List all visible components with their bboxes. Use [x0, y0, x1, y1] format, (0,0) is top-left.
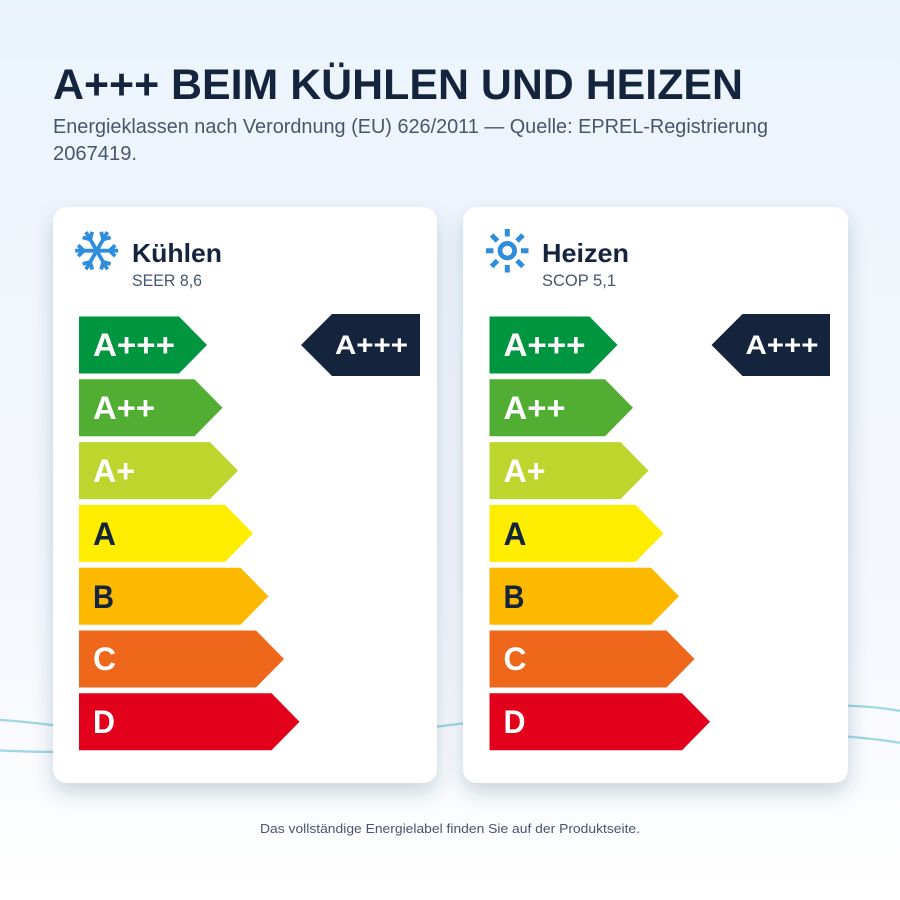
bar: A+: A+ — [93, 453, 135, 489]
bar: B: B — [93, 579, 114, 615]
subtitle: Energieklassen nach Verordnung (EU) 626/2011 — Quelle: EPREL-Registrierung — [53, 116, 768, 138]
bar: A: A — [93, 516, 116, 552]
footnote: Das vollständige Energielabel finden Sie auf der Produktseite. — [260, 821, 640, 836]
rating marker: A+++: A+++ — [746, 330, 818, 360]
bar: C: C — [93, 641, 116, 677]
bar: A++ — [490, 379, 633, 436]
bar: A+ — [79, 442, 238, 499]
bar: A — [79, 505, 253, 562]
subtitle: 2067419. — [53, 143, 137, 165]
bar: A++: A++ — [93, 390, 155, 426]
bar: A — [490, 505, 664, 562]
heading: Heizen: Heizen — [542, 238, 629, 268]
bar: B: B — [504, 579, 524, 615]
rating marker: A+++ — [712, 314, 830, 376]
bar: A++: A++ — [504, 390, 566, 426]
bar: C — [79, 630, 284, 688]
icon: sun — [486, 229, 528, 272]
bar: A+: A+ — [504, 453, 546, 489]
bar: B — [490, 568, 679, 625]
metric: SEER: SEER 8,6 — [132, 272, 202, 290]
bar: A+++ — [79, 316, 207, 374]
bar: A+ — [490, 442, 648, 499]
bar: A: A — [504, 516, 526, 552]
bar: D: D — [93, 704, 115, 740]
bar: C: C — [504, 641, 526, 677]
heading: Kühlen: Kühlen — [132, 238, 222, 268]
metric: SCOP: SCOP 5,1 — [542, 272, 616, 290]
bar: B — [79, 568, 268, 625]
rating marker: A+++: A+++ — [335, 330, 408, 360]
bar: D — [490, 693, 710, 750]
bar: C — [490, 630, 694, 688]
bar: A+++: A+++ — [504, 327, 586, 363]
bar: A+++ — [490, 316, 618, 374]
energy scale: Kühlen — [79, 316, 300, 750]
panel: Heizen — [463, 207, 848, 783]
energy scale: Heizen — [490, 316, 710, 750]
icon: snowflake — [75, 229, 118, 272]
rating marker: A+++ — [301, 314, 420, 376]
panel: Kühlen — [53, 207, 437, 783]
bar: D: D — [504, 704, 526, 740]
subtitle — [53, 116, 768, 165]
bar: D — [79, 693, 300, 750]
title: A+++ BEIM KÜHLEN UND HEIZEN — [53, 61, 743, 109]
bar: A+++: A+++ — [93, 327, 175, 363]
bar: A++ — [79, 379, 222, 436]
